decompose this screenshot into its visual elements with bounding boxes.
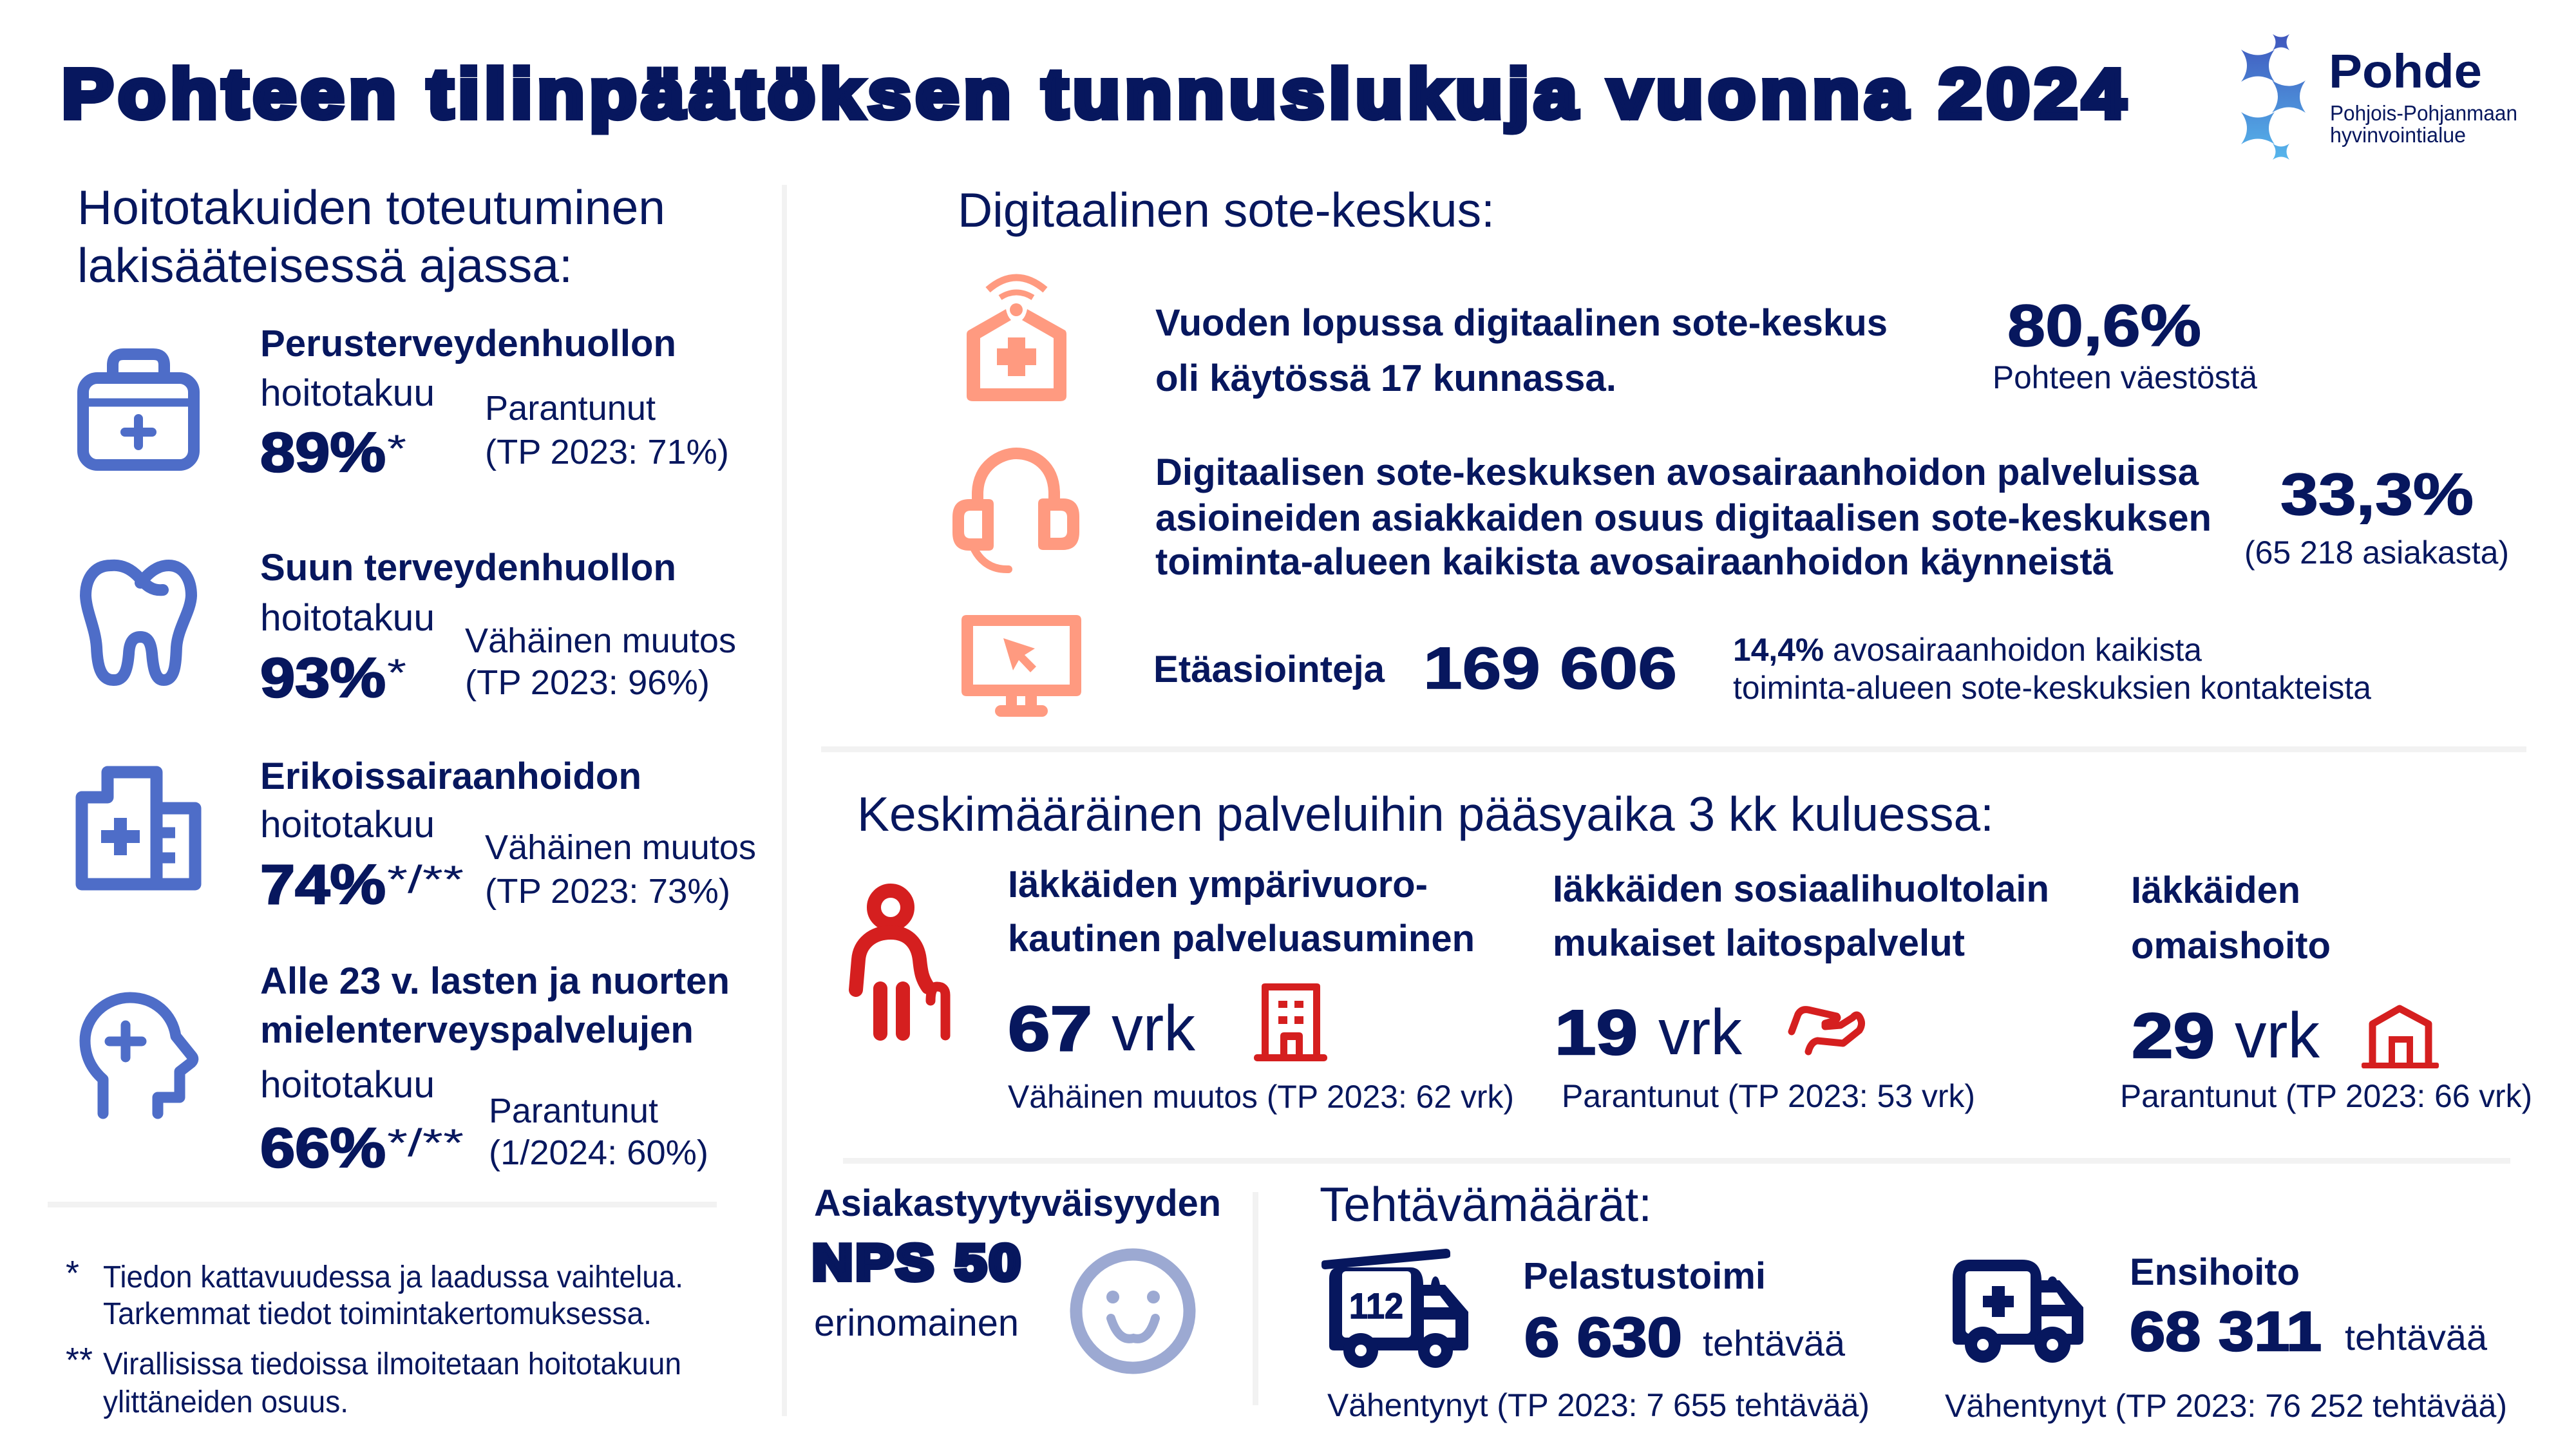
panel: palveluihin pääsyaika: [856, 787, 2532, 1115]
block: ympärivuorokautinen palveluasuminen: kautinen palveluasuminen: [1008, 918, 1475, 960]
block: laitospalvelut: Iäkkäiden sosiaalihuoltolain: [1553, 868, 2049, 910]
text: digital share of visits: asioineiden asiakkaiden osuus digitaalisen sote-keskuksen: [1155, 497, 2211, 539]
text: digital centre in 17 municipalities: Vuoden lopussa digitaalinen sote-keskus: [1155, 302, 1888, 344]
text: NPS: [812, 1182, 1221, 1344]
block: omaishoito: [2120, 869, 2532, 1114]
block: erikoissairaanhoito: [260, 755, 756, 916]
icon: headset: [952, 453, 1079, 569]
text: digital share of visits: [1155, 451, 2211, 583]
text: NPS: NPS 50: [812, 1234, 1023, 1291]
block: ensihoito: Vähentynyt (TP 2023: 76 252 tehtävää): [1945, 1388, 2507, 1424]
block: omaishoito: omaishoito: [2131, 925, 2331, 967]
block: perusterveydenhuolto: *: [387, 427, 406, 470]
block: pelastustoimi: tehtävää: [1703, 1323, 1846, 1363]
icon: fire truck: 112: [1349, 1285, 1403, 1326]
block: ensihoito: [1945, 1251, 2507, 1424]
block: ensihoito: 68 311: [2130, 1301, 2322, 1363]
footnotes: [66, 1254, 683, 1419]
icon: connected clinic: [967, 278, 1066, 401]
block: mielenterveyspalvelut: 66%: [260, 1117, 386, 1179]
icon: fire truck: [1321, 1249, 1468, 1368]
block: erikoissairaanhoito: hoitotakuu: [260, 804, 435, 846]
logo: Pohde: hyvinvointialue: [2330, 123, 2466, 147]
block: laitospalvelut: 19: [1555, 997, 1638, 1068]
block: mielenterveyspalvelut: [260, 960, 730, 1179]
text: share of contacts: 14,4% avosairaanhoidon kaikista: [1733, 632, 2202, 668]
panel: hoitotakuut: [77, 180, 756, 1179]
heading: digitaalinen sote-keskus: Digitaalinen sote-keskus:: [958, 183, 1495, 237]
stat: etäasiointeja: 169 606: [1423, 636, 1677, 701]
block: mielenterveyspalvelut: (1/2024: 60%): [489, 1133, 708, 1172]
text: digital share of visits: toiminta-alueen kaikista avosairaanhoidon käynneistä: [1155, 541, 2114, 583]
block: pelastustoimi: [1327, 1255, 1870, 1423]
stat: 33,3%: [2244, 462, 2509, 571]
icon: monitor with cursor: [961, 615, 1081, 717]
text: share of contacts: [1733, 632, 2371, 706]
block: mielenterveyspalvelut: Alle 23 v. lasten ja nuorten: [260, 960, 730, 1002]
block: pelastustoimi: Pelastustoimi: [1523, 1255, 1766, 1297]
logo: Pohde: [2241, 34, 2517, 160]
heading: palveluihin pääsyaika: Keskimääräinen palveluihin pääsyaika 3 kk kuluessa:: [857, 787, 1994, 841]
icon: tooth: [86, 565, 191, 680]
block: perusterveydenhuolto: [260, 323, 729, 484]
block: suun terveydenhuolto: (TP 2023: 96%): [465, 663, 710, 702]
block: perusterveydenhuolto: (TP 2023: 71%): [485, 433, 729, 471]
divider: lower: [843, 1158, 2510, 1164]
vertical divider: lower: [1253, 1192, 1258, 1405]
block: ensihoito: tehtävää: [2345, 1317, 2488, 1358]
logo: Pohde: Pohjois-Pohjanmaan: [2330, 101, 2517, 125]
icon: first aid kit: [83, 354, 194, 465]
block: mielenterveyspalvelut: */**: [387, 1121, 464, 1164]
stat: etäasiointeja: Etäasiointeja: [1153, 649, 1385, 690]
icon: hospital: [82, 772, 195, 884]
heading: tehtävämäärät: Tehtävämäärät:: [1320, 1177, 1652, 1231]
icon: smiley: [1076, 1255, 1189, 1368]
icon: ambulance: [1953, 1260, 2083, 1363]
block: perusterveydenhuolto: 89%: [260, 422, 386, 484]
text: NPS: erinomainen: [814, 1302, 1019, 1344]
block: pelastustoimi: Vähentynyt (TP 2023: 7 655 tehtävää): [1327, 1387, 1870, 1423]
stat: etäasiointeja: [1153, 636, 1677, 701]
divider: middle: [821, 746, 2526, 752]
block: pelastustoimi: 6 630: [1524, 1307, 1682, 1368]
footnotes: Tarkemmat tiedot toimintakertomuksessa.: [103, 1297, 652, 1331]
icon: head with plus: [85, 998, 193, 1113]
logo: Pohde: Pohde: [2329, 44, 2482, 98]
icon: elderly person: [856, 891, 945, 1036]
block: erikoissairaanhoito: 74%: [260, 854, 386, 916]
stat: 33,3%: (65 218 asiakasta): [2244, 535, 2509, 571]
block: mielenterveyspalvelut: Parantunut: [489, 1092, 658, 1130]
heading: hoitotakuut: Hoitotakuiden toteutuminen: [77, 180, 665, 234]
panel: digitaalinen sote-keskus: [952, 183, 2509, 717]
block: laitospalvelut: vrk: [1658, 996, 1743, 1068]
footnotes: Tiedon kattavuudessa ja laadussa vaihtelua.: [103, 1260, 683, 1294]
block: suun terveydenhuolto: Suun terveydenhuollon: [260, 547, 676, 589]
block: omaishoito: Parantunut (TP 2023: 66 vrk): [2120, 1078, 2532, 1114]
icon: house: [2362, 1009, 2439, 1068]
panel: asiakastyytyväisyys: [812, 1182, 1221, 1368]
text: share of contacts: toiminta-alueen sote-keskuksien kontakteista: [1733, 670, 2371, 706]
block: ympärivuorokautinen palveluasuminen: vrk: [1112, 992, 1196, 1065]
block: ympärivuorokautinen palveluasuminen: Vähäinen muutos (TP 2023: 62 vrk): [1008, 1079, 1514, 1115]
text: digital centre in 17 municipalities: [1155, 302, 1888, 399]
block: laitospalvelut: [1553, 868, 2049, 1114]
block: erikoissairaanhoito: (TP 2023: 73%): [485, 872, 730, 911]
footnotes: ylittäneiden osuus.: [103, 1385, 348, 1419]
block: omaishoito: vrk: [2235, 999, 2320, 1072]
block: ensihoito: Ensihoito: [2130, 1251, 2300, 1293]
block: suun terveydenhuolto: [260, 547, 736, 709]
block: mielenterveyspalvelut: mielenterveyspalvelujen: [260, 1009, 694, 1051]
title: Pohteen tilinpäätöksen tunnuslukuja vuonna 2024: [62, 54, 2130, 133]
heading: hoitotakuut: lakisääteisessä ajassa:: [77, 238, 573, 292]
block: laitospalvelut: Parantunut (TP 2023: 53 vrk): [1562, 1078, 1975, 1114]
icon: apartment building: [1254, 983, 1327, 1061]
block: perusterveydenhuolto: Parantunut: [485, 389, 656, 428]
block: erikoissairaanhoito: Erikoissairaanhoidon: [260, 755, 641, 797]
block: mielenterveyspalvelut: hoitotakuu: [260, 1064, 435, 1106]
block: erikoissairaanhoito: */**: [387, 858, 464, 901]
heading: hoitotakuut: [77, 180, 665, 292]
block: suun terveydenhuolto: Vähäinen muutos: [465, 621, 736, 660]
block: suun terveydenhuolto: *: [387, 651, 406, 694]
block: suun terveydenhuolto: 93%: [260, 647, 386, 709]
block: perusterveydenhuolto: Perusterveydenhuollon: [260, 323, 676, 365]
block: omaishoito: Iäkkäiden: [2131, 869, 2300, 911]
block: ympärivuorokautinen palveluasuminen: 67: [1008, 993, 1092, 1064]
block: perusterveydenhuolto: hoitotakuu: [260, 372, 435, 414]
block: suun terveydenhuolto: hoitotakuu: [260, 597, 435, 639]
icon: caring hands: [1792, 1010, 1862, 1052]
divider: footnotes: [48, 1202, 717, 1208]
vertical divider: left column: [782, 185, 787, 1416]
stat: 80,6%: 80,6%: [2007, 293, 2201, 359]
footnotes: **: [66, 1341, 93, 1379]
block: ympärivuorokautinen palveluasuminen: [1008, 864, 1514, 1115]
stat: 80,6%: Pohteen väestöstä: [1993, 359, 2257, 395]
text: NPS: Asiakastyytyväisyyden: [814, 1182, 1221, 1224]
stat: 80,6%: [1993, 293, 2257, 395]
footnotes: Virallisissa tiedoissa ilmoitetaan hoitotakuun: [103, 1347, 681, 1381]
footnotes: *: [66, 1254, 79, 1293]
block: erikoissairaanhoito: Vähäinen muutos: [485, 828, 756, 867]
panel: tehtävämäärät: [1320, 1177, 2507, 1424]
text: digital share of visits: Digitaalisen sote-keskuksen avosairaanhoidon palveluissa: [1155, 451, 2199, 493]
stat: 33,3%: 33,3%: [2280, 462, 2474, 527]
block: omaishoito: 29: [2132, 1000, 2215, 1071]
block: laitospalvelut: mukaiset laitospalvelut: [1553, 922, 1965, 964]
text: digital centre in 17 municipalities: oli käytössä 17 kunnassa.: [1155, 357, 1616, 399]
block: ympärivuorokautinen palveluasuminen: Iäkkäiden ympärivuoro-: [1008, 864, 1428, 905]
